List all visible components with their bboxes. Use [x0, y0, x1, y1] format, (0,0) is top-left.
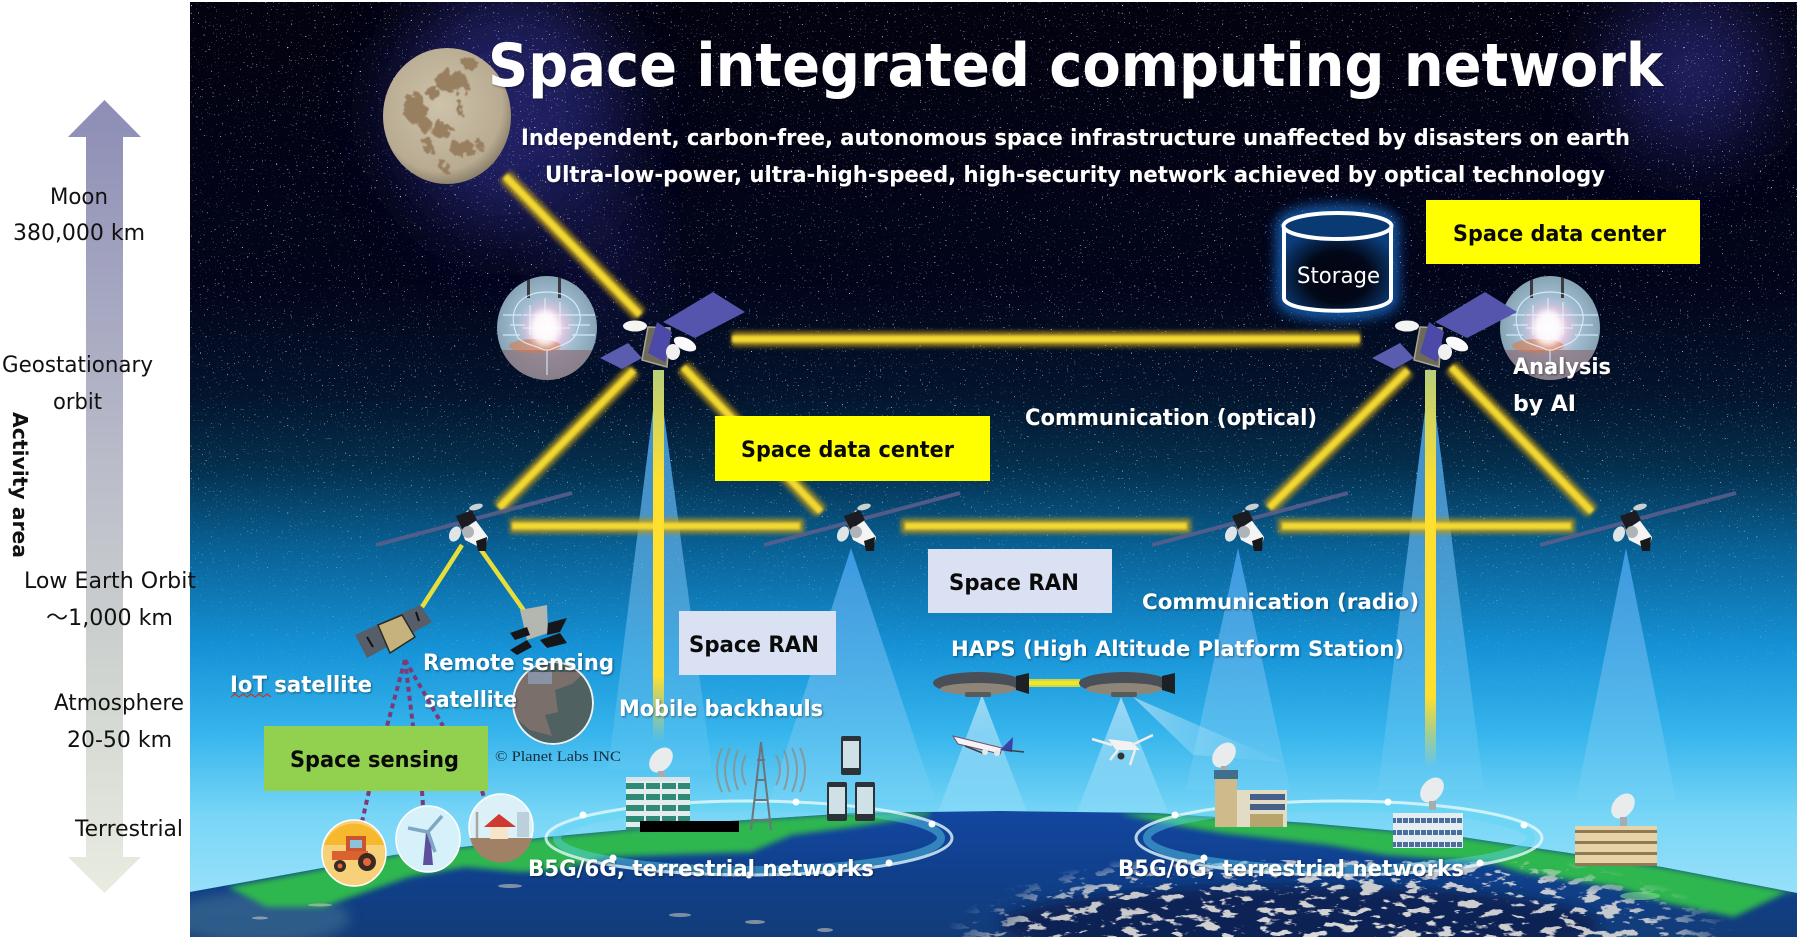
icon: IoT satellite — [355, 605, 432, 658]
callout: space data center left: Space data center — [741, 438, 954, 463]
title: Space integrated computing network — [488, 31, 1665, 101]
label: terrestrial networks left: B5G/6G, terrestrial networks — [528, 857, 874, 882]
callout: space RAN right: Space RAN — [949, 571, 1079, 596]
left altitude labels: Low Earth Orbit — [24, 569, 196, 594]
left altitude labels: orbit — [53, 390, 102, 415]
label: remote sensing satellite — [423, 651, 614, 713]
icon: ground station office — [1575, 789, 1657, 866]
left altitude labels: ～1,000 km — [46, 606, 173, 631]
subtitle: Independent, carbon-free, autonomous space infrastructure unaffected by disasters on earth — [521, 126, 1630, 151]
callout: space data center top right — [1426, 200, 1700, 264]
icon: GEO satellite left — [600, 292, 745, 369]
label: analysis by AI: by AI — [1513, 392, 1576, 417]
icon: airplane — [953, 736, 1024, 756]
sensing links — [362, 660, 485, 822]
label: analysis by AI: Analysis — [1513, 355, 1611, 380]
label: communication optical: Communication (optical) — [1025, 406, 1317, 431]
icon: storage cylinder — [1284, 212, 1392, 312]
label: IoT satellite: IoT satellite — [230, 673, 372, 698]
icon: ground station tower — [1207, 738, 1287, 827]
network rings — [546, 798, 1542, 878]
label: HAPS: HAPS (High Altitude Platform Station) — [951, 637, 1404, 661]
activity area arrow — [68, 100, 141, 893]
left altitude labels: 380,000 km — [13, 221, 145, 246]
icon: airship left — [933, 672, 1029, 697]
moon — [383, 48, 511, 184]
icon: LEO satellite 1 — [376, 493, 572, 551]
icon: cell tower — [717, 742, 805, 830]
left altitude labels: Geostationary — [2, 353, 153, 378]
label: remote sensing satellite: Remote sensing — [423, 651, 614, 676]
left altitude labels — [2, 185, 196, 842]
icon: LEO satellite 3 — [1152, 493, 1348, 551]
label: terrestrial networks right: B5G/6G, terrestrial networks — [1118, 857, 1464, 882]
radio beam cones — [608, 370, 1676, 812]
optical links — [422, 176, 1592, 768]
earth — [170, 811, 1797, 944]
icon: smartphones — [827, 736, 875, 821]
label: remote sensing satellite: satellite — [424, 688, 517, 713]
label: analysis by AI — [1513, 355, 1611, 417]
callout: space data center left — [715, 416, 990, 481]
icon: AI brain left — [497, 276, 597, 380]
label: Planet Labs credit: © Planet Labs INC — [495, 749, 621, 765]
land: left — [228, 812, 930, 907]
icon: storage cylinder: Storage — [1297, 264, 1380, 289]
subtitle: Ultra-low-power, ultra-high-speed, high-security network achieved by optical technology — [545, 163, 1605, 188]
icon: ground station left — [626, 743, 690, 830]
icon: AI brain right — [1500, 276, 1600, 380]
subtitle — [521, 126, 1630, 188]
callout: space sensing: Space sensing — [290, 748, 459, 773]
icon: drone — [1092, 735, 1153, 765]
label: mobile backhauls: Mobile backhauls — [619, 697, 823, 722]
redaction bar — [640, 821, 739, 832]
left altitude labels: Atmosphere — [54, 691, 184, 716]
icon: remote sensing satellite — [510, 605, 567, 655]
land: right — [1118, 813, 1797, 917]
icon: LEO satellite 2 — [764, 493, 960, 551]
callout: space RAN right — [928, 549, 1112, 613]
callout: space data center top right: Space data center — [1453, 222, 1666, 247]
icon: GEO satellite right — [1372, 292, 1517, 369]
icon: wind turbine — [396, 806, 460, 872]
callout: space RAN left: Space RAN — [689, 633, 819, 658]
left altitude labels: 20-50 km — [67, 728, 172, 753]
icon: ground station building — [1393, 773, 1463, 848]
left altitude labels: Moon — [50, 185, 108, 210]
icon: earth observation image — [512, 662, 596, 747]
icon: airship right — [1079, 672, 1175, 697]
icon: LEO satellite 4 — [1540, 493, 1736, 551]
left altitude labels: Terrestrial — [74, 817, 183, 842]
icon: house — [469, 794, 533, 863]
label: communication radio: Communication (radio) — [1142, 590, 1419, 614]
activity area label: Activity area — [8, 412, 32, 558]
callout: space sensing — [264, 726, 488, 791]
icon: tractor — [322, 820, 386, 886]
callout: space RAN left — [679, 611, 836, 675]
